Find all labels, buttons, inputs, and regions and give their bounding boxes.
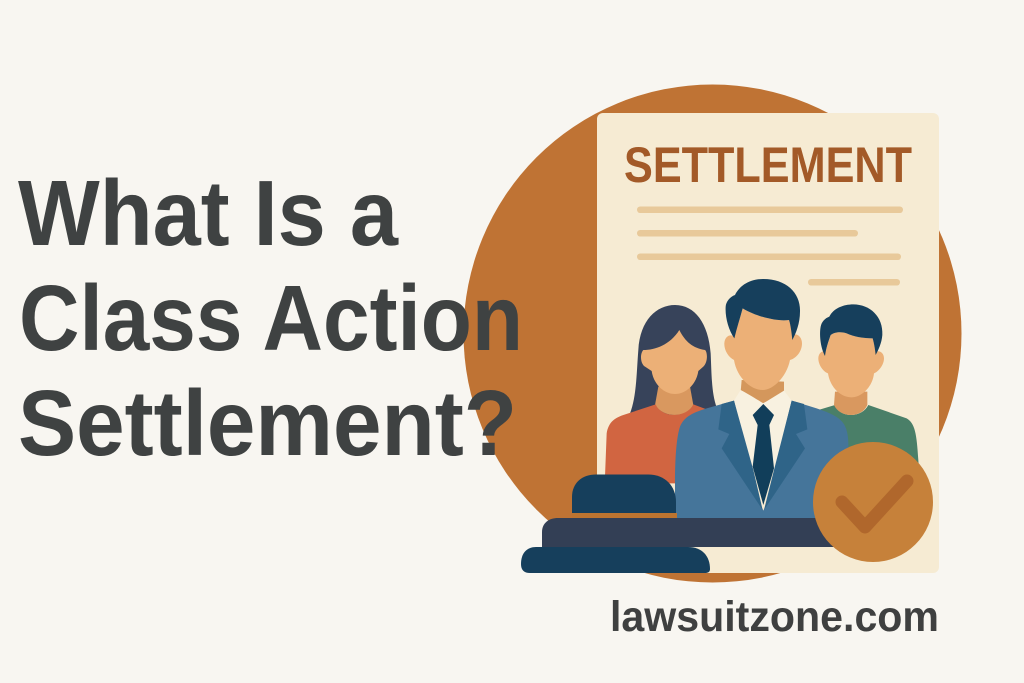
document text lines bbox=[637, 206, 903, 286]
document panel bbox=[597, 113, 939, 573]
person: man right bbox=[818, 304, 920, 483]
person: man in suit bbox=[675, 279, 848, 518]
title: Class Action bbox=[19, 266, 523, 370]
gavel block bbox=[521, 474, 845, 573]
icon: check badge bbox=[813, 442, 933, 562]
title bbox=[18, 161, 523, 475]
title: Settlement? bbox=[18, 371, 517, 475]
person: woman bbox=[605, 305, 717, 483]
group of people bbox=[605, 279, 920, 518]
website label: lawsuitzone.com bbox=[610, 593, 939, 641]
document heading: SETTLEMENT bbox=[624, 136, 912, 193]
title: What Is a bbox=[18, 161, 399, 265]
background circle bbox=[464, 84, 962, 582]
